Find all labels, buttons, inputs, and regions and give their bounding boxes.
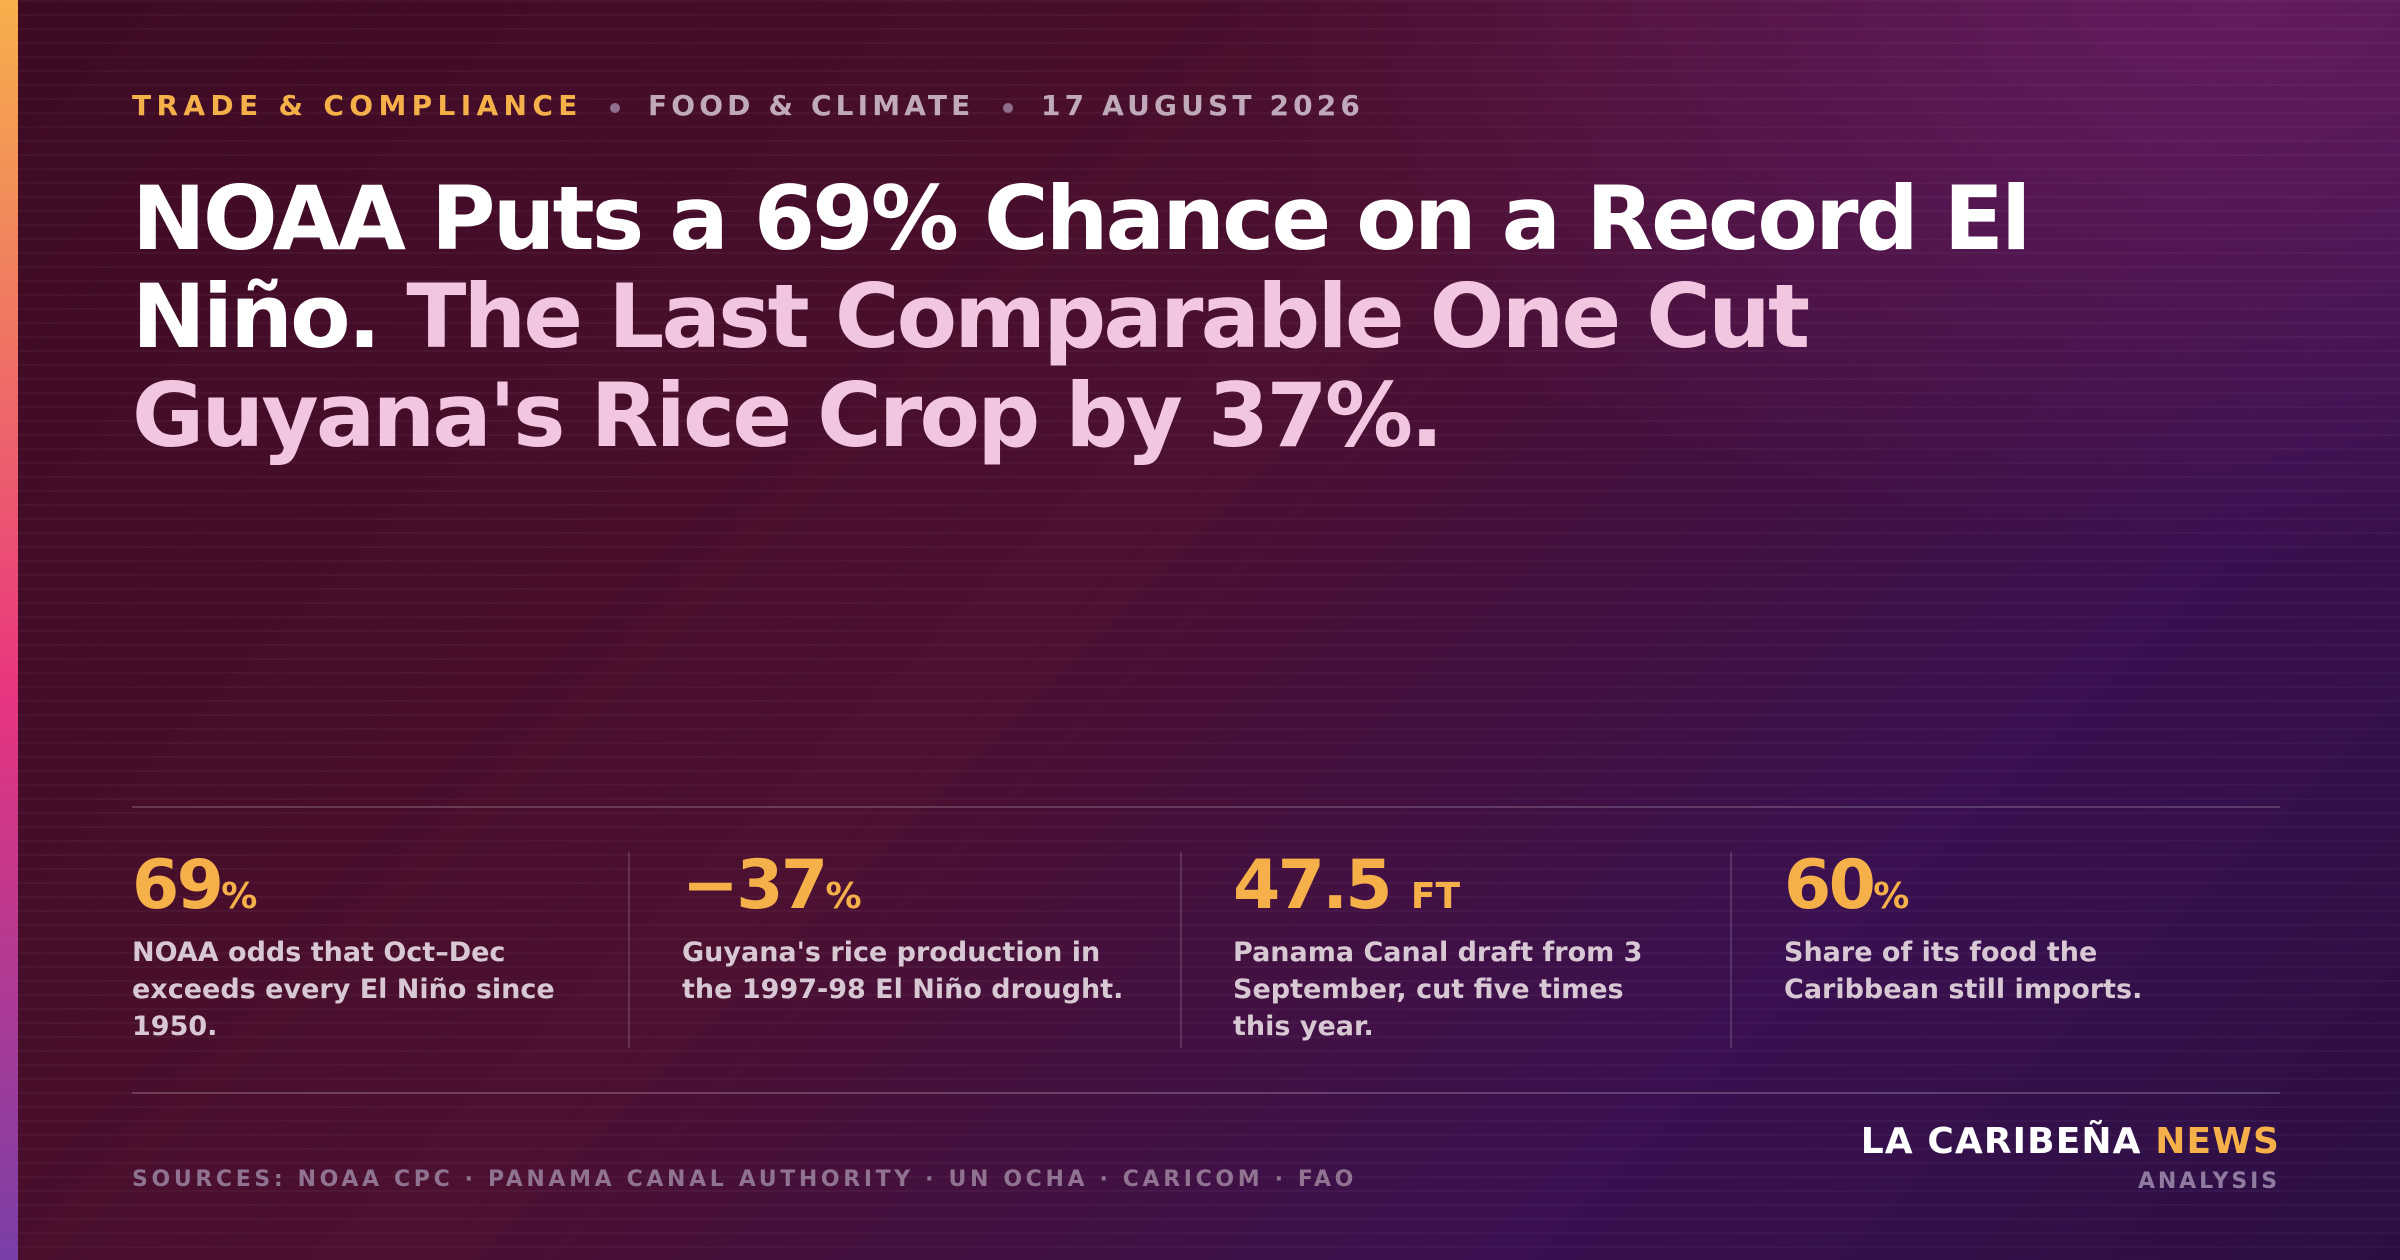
left accent bar xyxy=(0,0,18,1260)
stat 2 description: the 1997-98 El Niño drought. xyxy=(682,974,1123,1005)
stat 4 xyxy=(1784,846,2142,1005)
stat 4 description: Share of its food the xyxy=(1784,937,2097,968)
stat 4 number: 60% xyxy=(1784,846,1909,925)
brand xyxy=(1861,1120,2280,1194)
kicker: dot xyxy=(1003,103,1013,113)
stat 3 description: September, cut five times xyxy=(1233,974,1624,1005)
divider 3 xyxy=(1730,852,1732,1048)
stat 2 number: −37% xyxy=(682,846,862,925)
kicker line xyxy=(132,89,1364,122)
divider 1 xyxy=(628,852,630,1048)
stat 1 description: exceeds every El Niño since xyxy=(132,974,555,1005)
stat 1 description: NOAA odds that Oct–Dec xyxy=(132,937,505,968)
stat 4 description xyxy=(1784,937,2142,1005)
headline: Guyana's Rice Crop by 37%. xyxy=(132,364,1441,466)
stat 2 description xyxy=(682,937,1123,1005)
stat 4 description: Caribbean still imports. xyxy=(1784,974,2142,1005)
stat 3 number: 47.5 FT xyxy=(1233,846,1460,925)
bottom rule xyxy=(132,1092,2280,1094)
stat 2 description: Guyana's rice production in xyxy=(682,937,1100,968)
kicker: dot xyxy=(610,103,620,113)
kicker: date: 17 AUGUST 2026 xyxy=(1041,89,1364,122)
headline: NOAA Puts a 69% Chance on a Record El xyxy=(132,166,2028,270)
stat 1 description xyxy=(132,937,555,1042)
headline xyxy=(132,166,2028,466)
stat 3 xyxy=(1233,846,1642,1042)
stat 2 xyxy=(682,846,1123,1005)
stat 3 description: Panama Canal draft from 3 xyxy=(1233,937,1642,968)
sources line: SOURCES: NOAA CPC · PANAMA CANAL AUTHORITY · UN OCHA · CARICOM · FAO xyxy=(132,1166,1357,1192)
kicker: topic: FOOD & CLIMATE xyxy=(648,89,974,122)
stat 1 xyxy=(132,846,555,1042)
kicker: category: TRADE & COMPLIANCE xyxy=(132,89,583,122)
brand name: LA CARIBEÑA NEWS xyxy=(1861,1121,2280,1162)
stat 1 description: 1950. xyxy=(132,1011,217,1042)
stat 1 number: 69% xyxy=(132,846,257,925)
brand sub label: ANALYSIS xyxy=(2138,1169,2280,1194)
top rule of stats xyxy=(132,806,2280,808)
stat 3 description: this year. xyxy=(1233,1011,1374,1042)
headline: Niño. The Last Comparable One Cut xyxy=(132,265,1807,368)
divider 2 xyxy=(1180,852,1182,1048)
stat 3 description xyxy=(1233,937,1642,1042)
